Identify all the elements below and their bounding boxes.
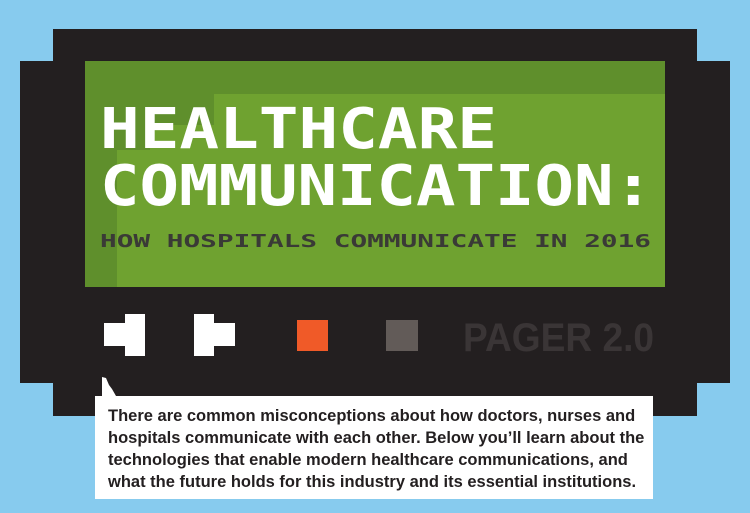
intro text box: what the future holds for this industry and its essential institutions. xyxy=(108,473,636,491)
screen xyxy=(85,61,665,287)
title xyxy=(100,97,653,252)
icon: gray button xyxy=(386,320,418,351)
icon: orange button xyxy=(297,320,328,351)
subtitle: HOW HOSPITALS COMMUNICATE IN 2016 xyxy=(100,231,651,252)
pager label: PAGER 2.0 xyxy=(463,316,654,360)
icon: right arrow button xyxy=(194,314,235,356)
title: COMMUNICATION: xyxy=(100,154,653,219)
title: HEALTHCARE xyxy=(100,97,497,162)
pager body xyxy=(20,29,730,416)
speech bubble pointer xyxy=(102,377,116,396)
intro text box xyxy=(95,396,653,499)
intro text box: technologies that enable modern healthcare communications, and xyxy=(108,451,628,469)
intro text box: There are common misconceptions about how doctors, nurses and xyxy=(108,407,635,425)
intro text box: hospitals communicate with each other. Below you’ll learn about the xyxy=(108,429,644,447)
icon: left arrow button xyxy=(104,314,145,356)
